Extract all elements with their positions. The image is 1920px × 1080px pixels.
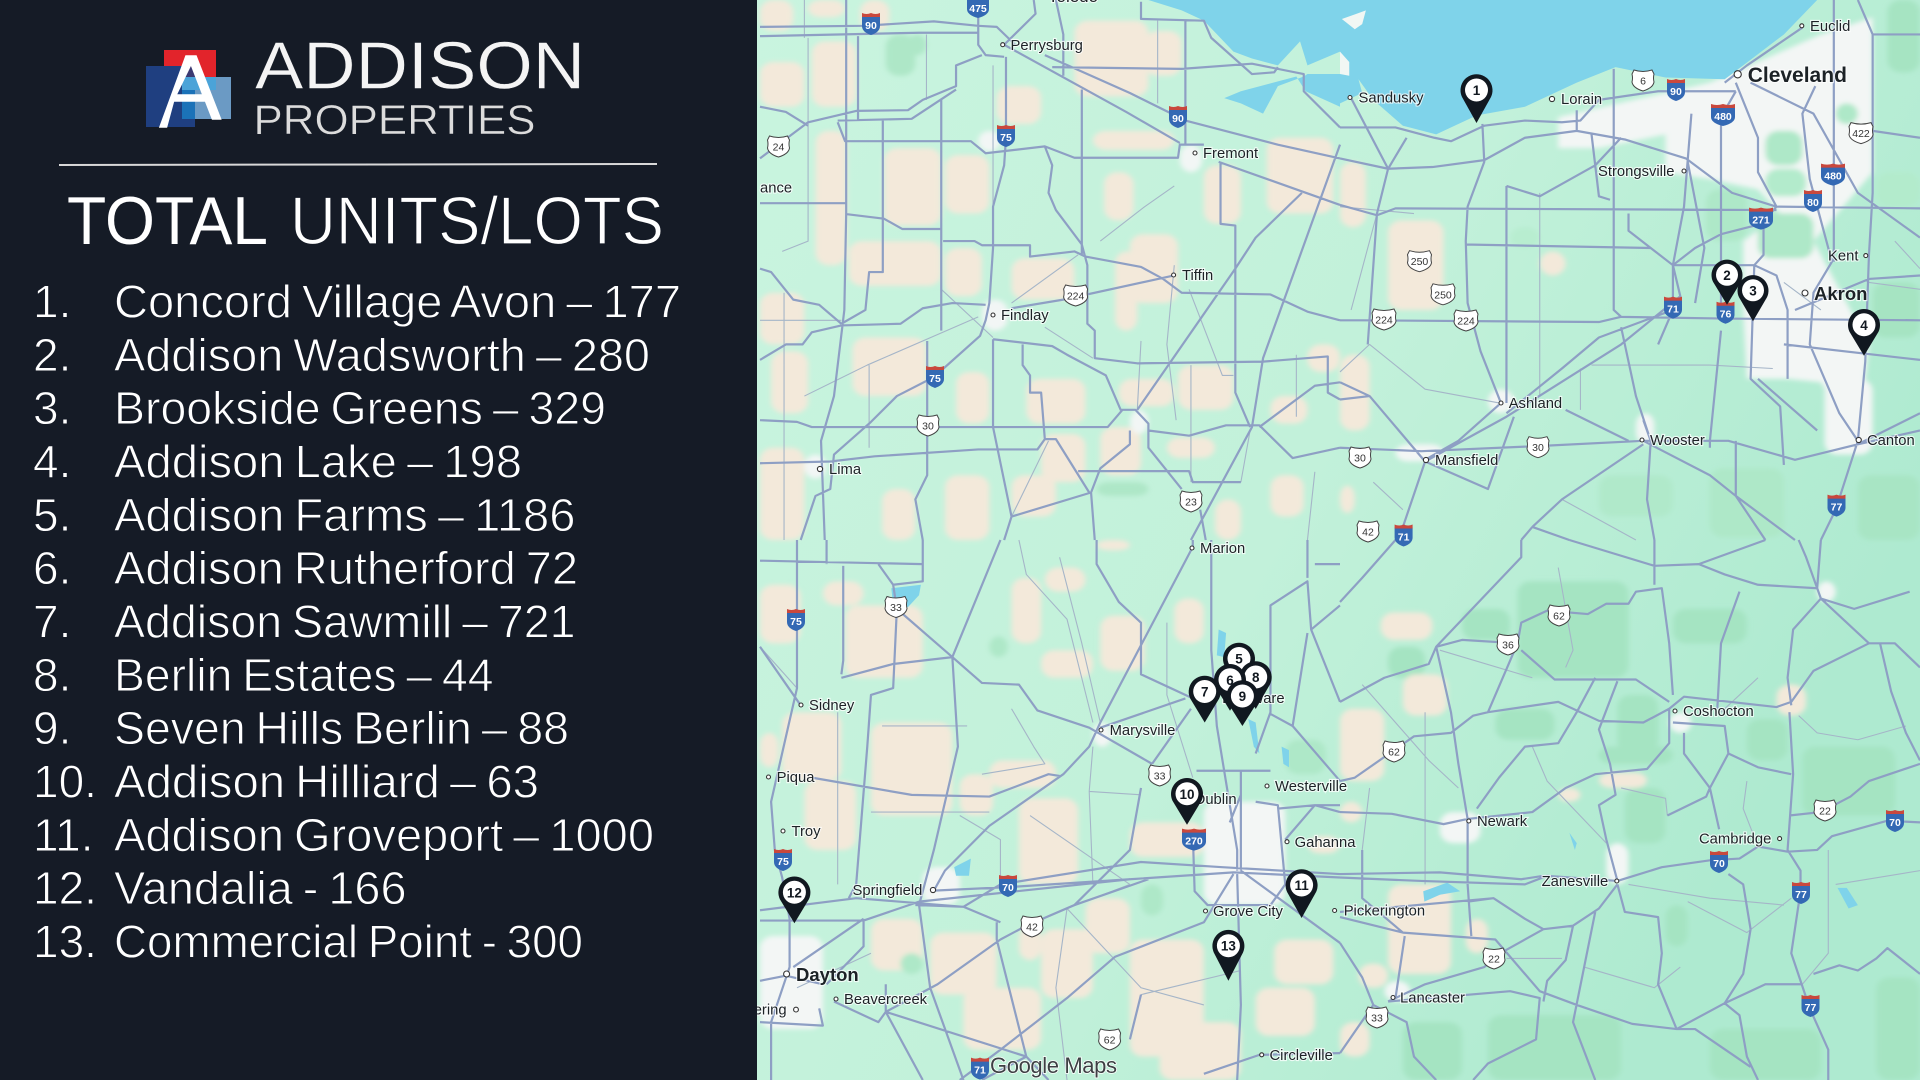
road shields: 71 <box>974 1065 986 1077</box>
property list: 12. <box>33 862 97 914</box>
city labels: Lorain <box>1561 92 1602 108</box>
property list: Seven Hills Berlin – 88 <box>114 702 569 754</box>
lake erie and inland water <box>891 0 1858 909</box>
road shields: 250 <box>1434 289 1452 301</box>
road shields: 271 <box>1752 215 1770 227</box>
city labels: ance <box>760 180 792 196</box>
road shields: 76 <box>1720 309 1731 321</box>
road shields: 33 <box>1154 770 1166 782</box>
city labels: Cambridge <box>1699 832 1771 848</box>
road shields: 475 <box>969 3 987 15</box>
city labels <box>754 0 1915 1064</box>
title <box>67 183 664 259</box>
city labels: Gahanna <box>1295 835 1356 851</box>
city labels: Kent <box>1828 249 1858 265</box>
city labels: Euclid <box>1810 19 1850 35</box>
pin 7 <box>1189 676 1221 722</box>
road shields <box>768 0 1904 1080</box>
pin 9 <box>1226 680 1258 726</box>
panel background <box>0 0 757 1080</box>
property list: 9. <box>33 702 71 754</box>
google maps watermark: Google Maps <box>990 1053 1117 1078</box>
property list: 4. <box>33 436 71 488</box>
road shields: 70 <box>1713 858 1725 870</box>
city labels: Findlay <box>1001 308 1049 324</box>
city labels: Lima <box>829 462 862 478</box>
city labels: Mansfield <box>1435 453 1498 469</box>
property list: Vandalia - 166 <box>114 862 406 914</box>
property list: Addison Hilliard – 63 <box>114 756 539 808</box>
road shields: 30 <box>1354 452 1366 464</box>
pin 1 <box>1460 74 1492 123</box>
pin 3 <box>1738 275 1768 321</box>
road shields: 33 <box>1371 1012 1383 1024</box>
road shields: 90 <box>865 20 877 32</box>
pin 5: 5 <box>1235 652 1243 666</box>
city labels: Troy <box>792 824 821 840</box>
city labels: Westerville <box>1275 779 1347 795</box>
city labels: Perrysburg <box>1010 38 1083 54</box>
divider <box>59 164 657 165</box>
pin 2: 2 <box>1723 268 1731 283</box>
city labels: Newark <box>1477 814 1528 830</box>
minor roads <box>760 0 1920 1080</box>
road shields: 224 <box>1457 316 1475 328</box>
road shields: 62 <box>1553 610 1565 622</box>
property list: 1. <box>33 276 71 328</box>
property list: Commercial Point - 300 <box>114 916 583 968</box>
road shields: 75 <box>790 616 802 628</box>
city labels: Dublin <box>1195 792 1237 808</box>
city labels: Lancaster <box>1400 990 1465 1006</box>
road shields: 6 <box>1640 76 1646 88</box>
road shields: 33 <box>890 602 902 614</box>
property list: 13. <box>33 916 97 968</box>
road shields: 36 <box>1502 640 1514 652</box>
road shields: 224 <box>1375 314 1393 326</box>
property list: 3. <box>33 382 71 434</box>
property list: 6. <box>33 542 71 594</box>
road shields: 22 <box>1488 954 1500 966</box>
road shields: 77 <box>1831 502 1842 514</box>
city labels: Marysville <box>1110 723 1175 739</box>
city labels: Sandusky <box>1358 90 1424 106</box>
property list: 11. <box>33 809 94 861</box>
road shields: 70 <box>1889 817 1901 829</box>
pin 6: 6 <box>1226 673 1234 688</box>
property list: Addison Rutherford 72 <box>114 542 578 594</box>
road shields: 480 <box>1824 171 1842 183</box>
property list: Brookside Greens – 329 <box>114 382 606 434</box>
city labels: Tiffin <box>1182 268 1213 284</box>
pin 1: 1 <box>1473 83 1481 98</box>
city labels: Canton <box>1867 433 1915 449</box>
city labels: Dayton <box>796 964 859 985</box>
road shields: 270 <box>1185 836 1203 848</box>
city labels: Marion <box>1200 541 1245 557</box>
title: TOTAL <box>67 183 268 259</box>
property list: 7. <box>33 596 71 648</box>
pin 8: 8 <box>1252 670 1260 685</box>
pin 12: 12 <box>787 885 802 900</box>
road shields: 90 <box>1172 113 1184 125</box>
land cover: north-east quadrant <box>1340 0 1920 540</box>
city labels: Strongsville <box>1598 164 1674 180</box>
property list: 2. <box>33 329 71 381</box>
city labels: Springfield <box>852 883 922 899</box>
road shields: 75 <box>1000 132 1012 144</box>
city labels: Delaware <box>1222 691 1285 707</box>
road shields: 90 <box>1670 86 1682 98</box>
pin 12 <box>778 877 810 923</box>
road shields: 42 <box>1026 922 1038 934</box>
pin 9: 9 <box>1239 689 1246 704</box>
pin 11: 11 <box>1294 878 1309 893</box>
city labels: Pickerington <box>1344 904 1425 920</box>
property list: 8. <box>33 649 71 701</box>
city labels: Akron <box>1814 283 1867 304</box>
property list: 5. <box>33 489 71 541</box>
property list: Concord Village Avon – 177 <box>114 276 681 328</box>
property list: Addison Wadsworth – 280 <box>114 329 650 381</box>
property list: Berlin Estates – 44 <box>114 649 494 701</box>
road shields: 62 <box>1104 1034 1116 1046</box>
road shields: 70 <box>1002 882 1014 894</box>
road shields: 62 <box>1388 746 1400 758</box>
pin 13 <box>1212 930 1244 981</box>
pin 8 <box>1240 661 1272 709</box>
property list: Addison Groveport – 1000 <box>114 809 654 861</box>
land cover: north-west quadrant <box>760 0 1340 540</box>
road shields: 30 <box>1532 442 1544 454</box>
land cover: south-west quadrant <box>760 540 1340 1080</box>
pin 10: 10 <box>1179 787 1195 802</box>
road shields: 75 <box>929 373 941 385</box>
road shields: 42 <box>1362 526 1374 538</box>
pin 3: 3 <box>1749 283 1757 298</box>
major roads <box>760 0 1920 1080</box>
pin 2 <box>1712 260 1742 305</box>
city labels: Zanesville <box>1542 874 1608 890</box>
road shields: 77 <box>1795 889 1807 901</box>
map panel <box>754 0 1920 1080</box>
pin 13: 13 <box>1221 939 1236 954</box>
property list: Addison Lake – 198 <box>114 436 522 488</box>
logo mark <box>146 50 231 127</box>
pin 7: 7 <box>1201 684 1208 700</box>
city labels: Circleville <box>1270 1048 1333 1064</box>
property list: Addison Sawmill – 721 <box>114 596 576 648</box>
city labels: Piqua <box>777 770 815 786</box>
pin 11 <box>1286 869 1318 918</box>
road shields: 23 <box>1185 496 1197 508</box>
pin 4 <box>1848 309 1880 356</box>
pin 4: 4 <box>1860 318 1868 333</box>
left panel <box>0 0 757 1080</box>
pin 6 <box>1214 664 1246 711</box>
road shields: 30 <box>922 420 934 432</box>
city labels: Beavercreek <box>844 992 928 1008</box>
road shields: 24 <box>773 142 784 154</box>
logo sub-wordmark: PROPERTIES <box>254 96 536 143</box>
road shields: 80 <box>1807 197 1819 209</box>
city labels: Ashland <box>1509 396 1562 412</box>
property list <box>33 276 681 968</box>
road shields: 480 <box>1714 111 1732 123</box>
road shields: 75 <box>777 856 789 868</box>
pin 10 <box>1171 778 1203 825</box>
road shields: 71 <box>1398 532 1410 544</box>
city labels: Fremont <box>1203 146 1258 162</box>
property list: Addison Farms – 1186 <box>114 489 576 541</box>
property list: 10. <box>33 756 97 808</box>
road shields: 77 <box>1805 1002 1816 1014</box>
city labels: Wooster <box>1650 433 1705 449</box>
logo <box>146 28 585 143</box>
land cover: south-east quadrant <box>1340 581 1920 1080</box>
city labels: Coshocton <box>1683 704 1754 720</box>
map land background <box>757 0 1920 1080</box>
road shields: 71 <box>1667 304 1679 316</box>
road shields: 422 <box>1852 128 1870 140</box>
city labels: Cleveland <box>1748 64 1847 87</box>
road shields: 250 <box>1411 256 1428 268</box>
road shields: 22 <box>1819 806 1831 818</box>
city labels: Grove City <box>1213 904 1283 920</box>
road shields: 224 <box>1067 290 1085 302</box>
city labels: ering <box>754 1003 787 1019</box>
pin 5 <box>1223 643 1255 692</box>
logo wordmark: ADDISON <box>255 28 585 104</box>
title: UNITS/LOTS <box>290 183 664 259</box>
city labels: Sidney <box>809 698 855 714</box>
